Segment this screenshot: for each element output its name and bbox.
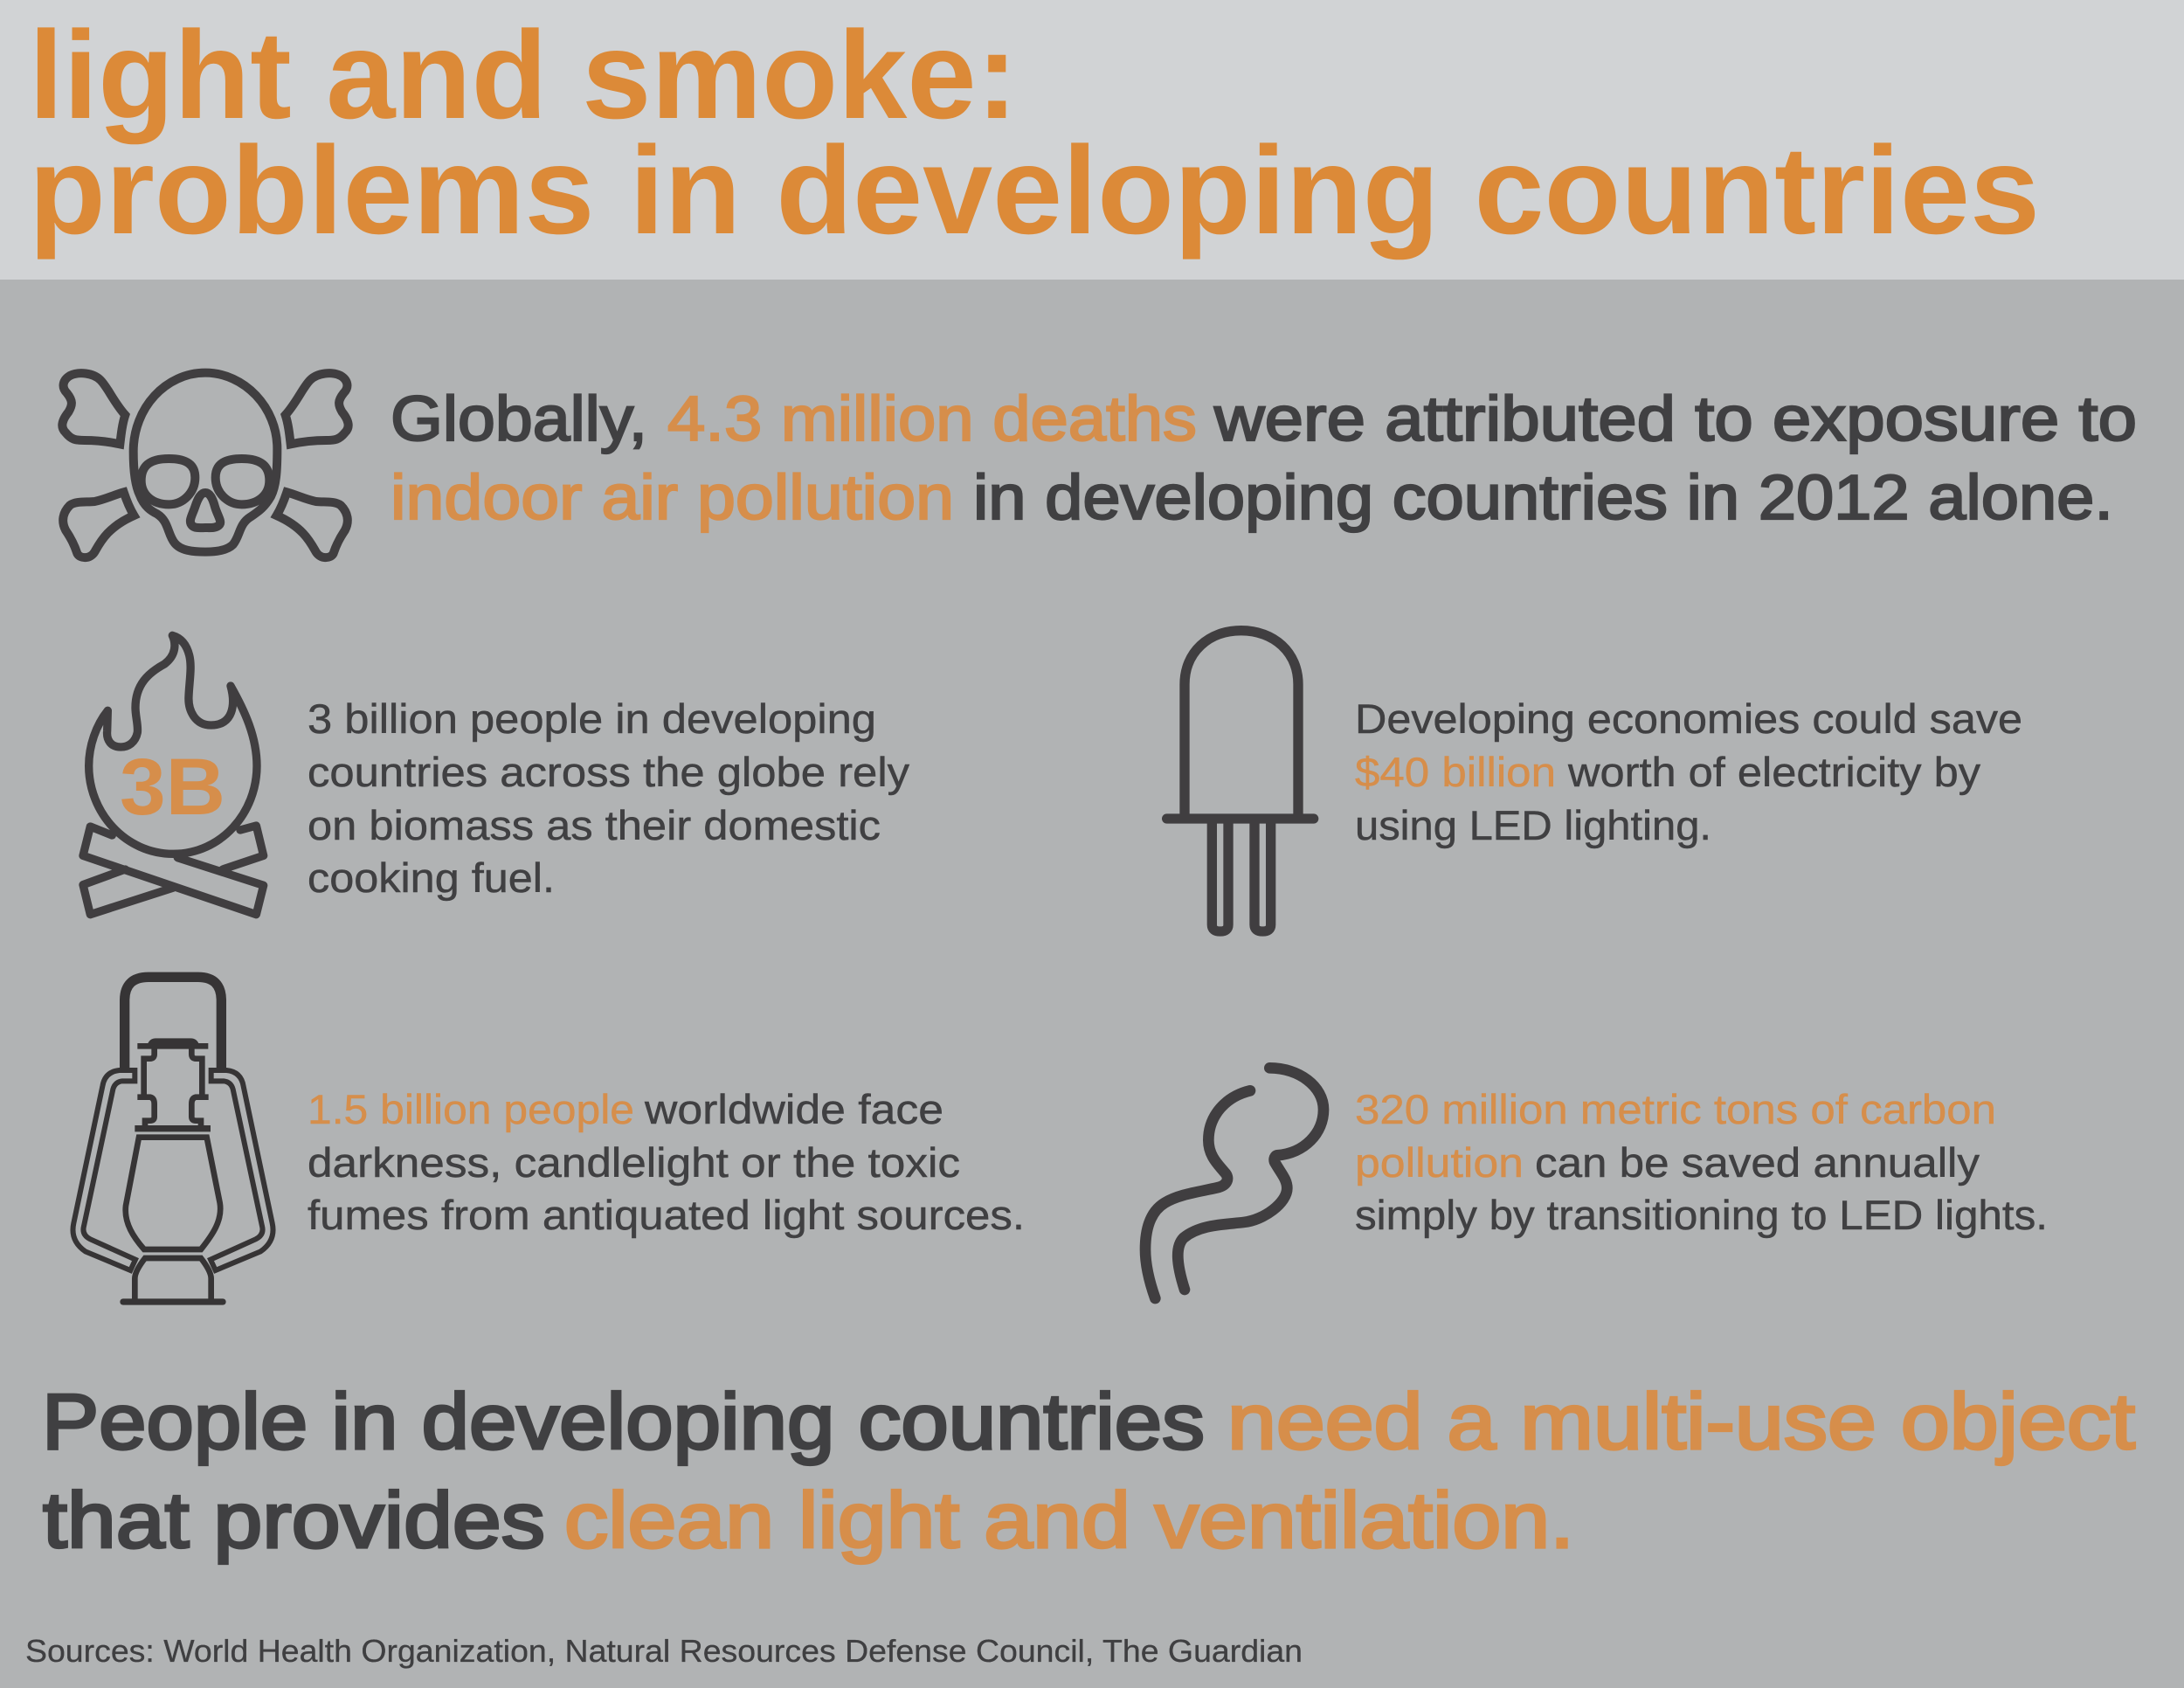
- title: problems in developing countries: [29, 121, 2040, 260]
- headline: global deaths statistic: in developing countries in 2012 alone.: [973, 463, 2113, 533]
- text block: darkness and toxic fumes: 1.5 billion people: [308, 1086, 634, 1132]
- text block: darkness and toxic fumes: worldwide face: [644, 1086, 943, 1132]
- icon: fire with 3B: [83, 635, 264, 915]
- text block: biomass: [308, 695, 910, 901]
- conclusion statement: need a multi-use object: [1227, 1379, 2135, 1466]
- text block: darkness and toxic fumes: fumes from antiquated light sources.: [308, 1192, 1025, 1238]
- text block: carbon pollution: simply by transitioning to LED lights.: [1355, 1192, 2048, 1238]
- headline: global deaths statistic: 4.3 million deaths: [667, 384, 1197, 454]
- text block: carbon pollution: 320 million metric tons of carbon: [1355, 1086, 1996, 1132]
- icon: fire with 3B: 3B: [120, 743, 225, 832]
- title: [29, 6, 2040, 260]
- text block: carbon pollution: pollution: [1355, 1139, 1524, 1186]
- text block: biomass: on biomass as their domestic: [308, 802, 881, 848]
- text block: LED savings: $40 billion: [1355, 749, 1556, 795]
- icon: LED: [1167, 631, 1314, 931]
- text block: LED savings: using LED lighting.: [1355, 802, 1711, 848]
- icon: smoke: [1145, 1068, 1324, 1298]
- text block: LED savings: Developing economies could save: [1355, 695, 2022, 742]
- conclusion statement: [42, 1379, 2135, 1565]
- conclusion statement: that provides: [43, 1477, 545, 1565]
- text block: darkness and toxic fumes: darkness, candlelight or the toxic: [308, 1139, 960, 1186]
- headline: global deaths statistic: Globally,: [390, 384, 647, 454]
- headline: global deaths statistic: were attributed to exposure to: [1213, 384, 2137, 454]
- conclusion statement: clean light and ventilation.: [564, 1477, 1574, 1565]
- headline: global deaths statistic: indoor air pollution: [390, 463, 954, 533]
- text block: carbon pollution: [1355, 1086, 2048, 1238]
- text block: carbon pollution: can be saved annually: [1535, 1139, 1980, 1186]
- text block: biomass: 3 billion people in developing: [308, 695, 876, 742]
- text block: biomass: cooking fuel.: [308, 854, 555, 901]
- text block: darkness and toxic fumes: [308, 1086, 1025, 1238]
- conclusion statement: People in developing countries: [42, 1379, 1205, 1466]
- icon: lantern: [73, 977, 273, 1302]
- text block: LED savings: [1355, 695, 2022, 848]
- icon: skull and crossbones: [62, 373, 349, 557]
- headline: global deaths statistic: [390, 384, 2137, 533]
- title: light and smoke:: [29, 6, 1018, 145]
- sources: Sources: World Health Organization, Natural Resources Defense Council, The Guardian: [25, 1633, 1303, 1669]
- text block: LED savings: worth of electricity by: [1567, 749, 1981, 795]
- text block: biomass: countries across the globe rely: [308, 749, 910, 795]
